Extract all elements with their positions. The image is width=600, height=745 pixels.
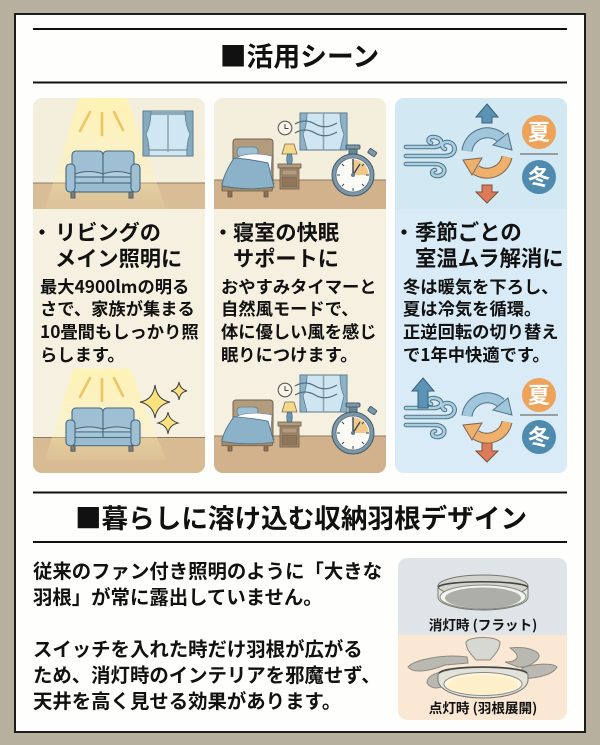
panel title: メイン照明に xyxy=(55,242,182,273)
heading: 収納羽根デザイン: ■暮らしに溶け込む収納羽根デザイン xyxy=(75,497,527,536)
panel body text: 10畳間もしっかり照 xyxy=(40,318,199,343)
illustration: bed, wind and timer xyxy=(214,113,386,209)
panel body text: らします。 xyxy=(40,341,125,366)
arrow: up xyxy=(476,104,498,123)
panel: bedroom xyxy=(214,98,386,473)
panel body text: 自然風モードで、 xyxy=(221,295,359,320)
product image panel xyxy=(398,558,567,720)
badge: winter: 冬 xyxy=(528,160,550,192)
caption: on: 点灯時 (羽根展開) xyxy=(429,697,537,717)
panel title xyxy=(39,222,180,268)
illustration: sofa with sparkles xyxy=(33,369,205,473)
description text: 天井を高く見せる効果があります。 xyxy=(33,685,341,714)
icon: fan with blades open (on) xyxy=(408,638,557,698)
panel body text: 冬は暖気を下ろし、 xyxy=(403,273,559,298)
panel: seasons xyxy=(395,98,567,473)
panel title: サポートに xyxy=(233,242,339,273)
arrow: down xyxy=(476,185,498,203)
bullet xyxy=(401,229,407,235)
badge: summer: 夏 xyxy=(528,115,550,147)
panel title: 室温ムラ解消に xyxy=(415,242,564,273)
panel title xyxy=(220,222,339,268)
illustration: bed, wind and timer (lower) xyxy=(214,375,386,473)
panel: living room xyxy=(33,98,205,473)
arrow: up xyxy=(412,378,434,408)
panel body text: で1年中快適です。 xyxy=(403,341,550,366)
heading: 活用シーン: ■活用シーン xyxy=(220,35,379,74)
badge: summer: 夏 xyxy=(528,378,550,410)
badge: summer xyxy=(522,378,556,412)
panel body text: 眠りにつけます。 xyxy=(221,341,358,366)
description text: ため、消灯時のインテリアを邪魔せず、 xyxy=(33,659,381,688)
bullet xyxy=(220,229,226,235)
arrow: down xyxy=(476,440,498,462)
panel body text: 体に優しい風を感じ xyxy=(221,318,377,343)
panel body text: さで、家族が集まる xyxy=(40,295,195,320)
panel body text: おやすみタイマーと xyxy=(221,273,377,298)
illustration: air circulation xyxy=(406,104,558,203)
panel body text xyxy=(221,278,375,362)
panel title: 寝室の快眠 xyxy=(233,216,339,247)
icon: flat ceiling light (off) xyxy=(438,575,528,610)
panel title xyxy=(401,221,562,268)
illustration: sofa under ceiling light xyxy=(33,98,205,209)
badge: winter xyxy=(522,420,556,454)
panel body text: 夏は冷気を循環。 xyxy=(403,295,541,320)
description text xyxy=(33,555,382,714)
badge: summer xyxy=(522,115,556,149)
panel body text xyxy=(403,273,559,366)
panel title: 季節ごとの xyxy=(415,216,522,247)
panel body text: 最大4900lmの明る xyxy=(40,273,189,298)
badge: winter xyxy=(522,160,556,194)
panel body text: 正逆回転の切り替え xyxy=(403,318,559,343)
illustration: air circulation (lower) xyxy=(406,378,558,462)
bullet xyxy=(39,229,45,235)
description text: スイッチを入れた時だけ羽根が広がる xyxy=(33,633,363,662)
description text: 羽根」が常に露出していません。 xyxy=(33,581,323,610)
panel title: リビングの xyxy=(55,216,161,247)
description text: 従来のファン付き照明のように「大きな xyxy=(33,555,382,584)
panel body text xyxy=(40,273,199,366)
caption: off: 消灯時 (フラット) xyxy=(429,614,537,634)
badge: winter: 冬 xyxy=(528,420,550,452)
